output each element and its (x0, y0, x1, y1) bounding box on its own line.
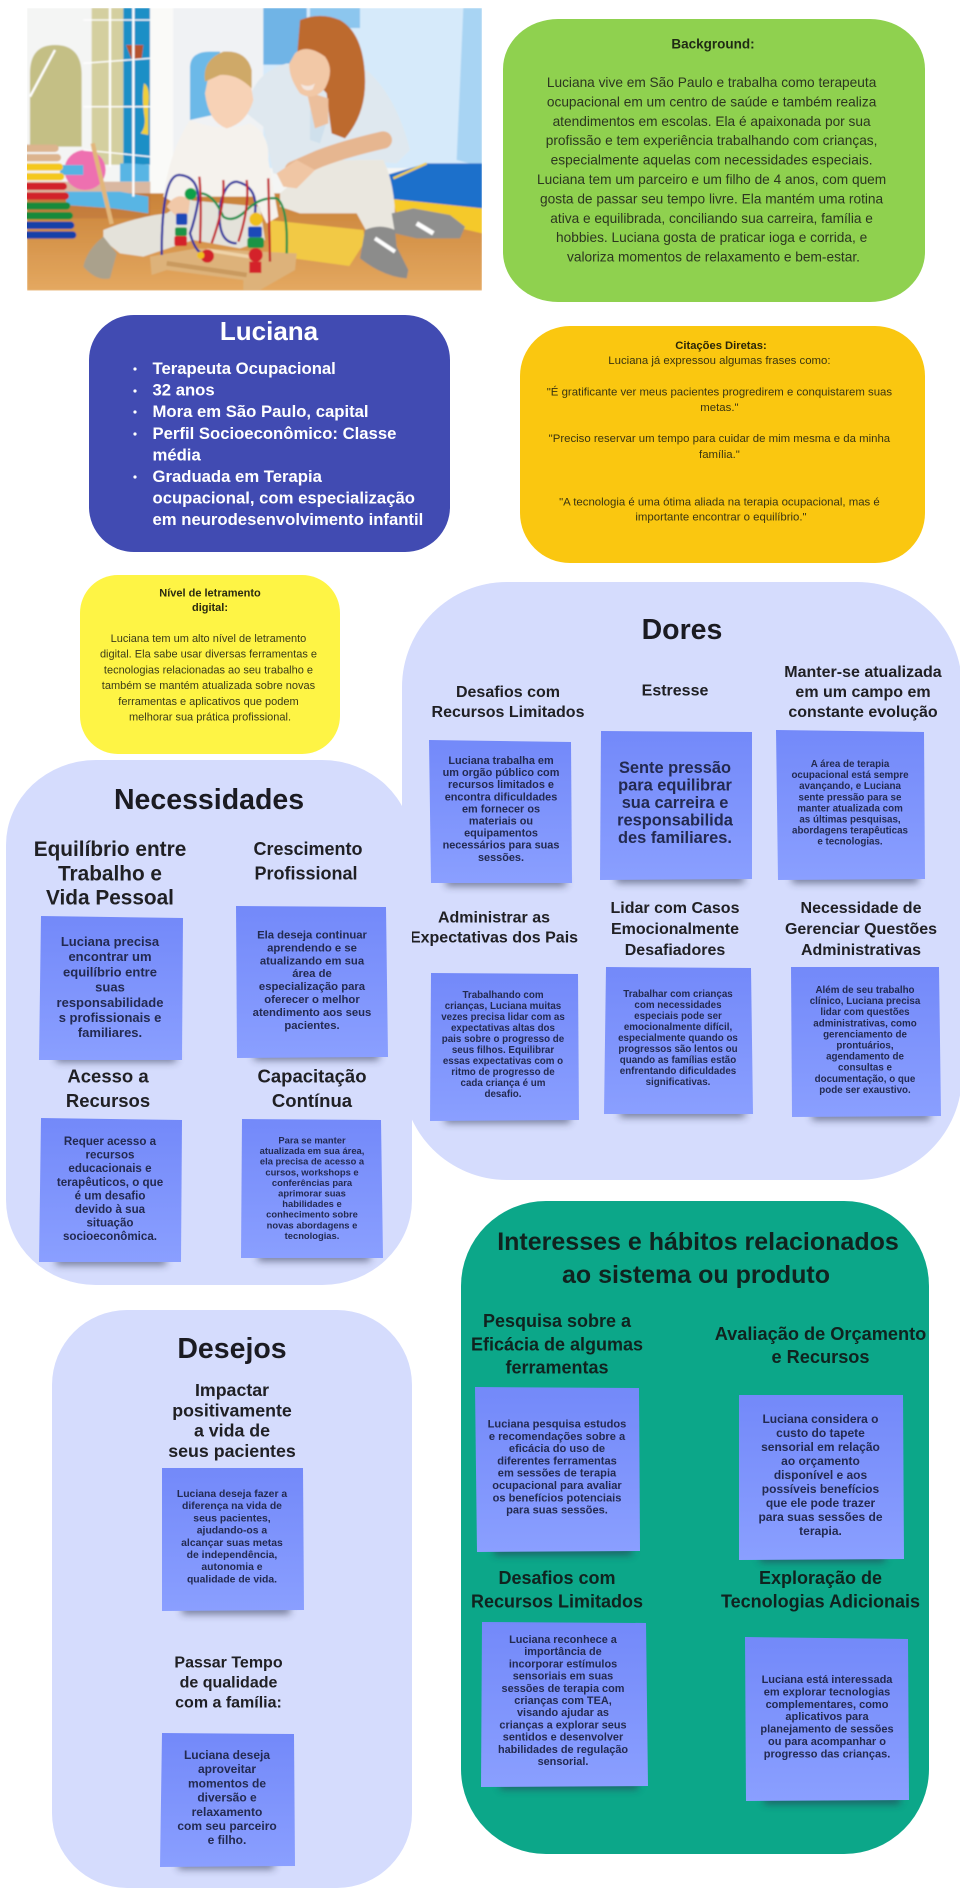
sticky note: pesquisa: ocupacional para avaliar (492, 1480, 622, 1492)
sticky note: acesso a recursos: devido à sua (75, 1202, 146, 1216)
sticky note: estresse (600, 731, 752, 883)
sticky note: capacitação: novas abordagens e (267, 1219, 357, 1230)
letramento text: tecnologias relacionadas ao seu trabalho e (104, 664, 313, 676)
sticky note: impactar (162, 1468, 304, 1614)
sticky note: questões administrativas: pode ser exaustivo. (819, 1084, 911, 1095)
sticky note: estímulos sensoriais: sensoriais em suas (513, 1671, 613, 1683)
sticky note: acesso a recursos: recursos (86, 1148, 134, 1161)
sticky note: passar tempo: Luciana deseja (184, 1748, 270, 1762)
sticky note: capacitação: Para se manter (278, 1134, 346, 1145)
heading: passar tempo: Passar Tempo (174, 1654, 283, 1671)
sticky note: capacitação: conhecimento sobre (266, 1208, 358, 1219)
profile bullet list: Graduada em Terapia (152, 466, 323, 486)
heading: desafios com recursos limitados: Recursos Limitados (471, 1592, 643, 1612)
sticky note: casos desafiadores: significativas. (646, 1076, 711, 1088)
sticky note: estímulos sensoriais: Luciana reconhece a (509, 1634, 618, 1646)
sticky note: questões administrativas: Além de seu trabalho (815, 984, 915, 996)
letramento text: melhorar sua prática profissional. (129, 712, 291, 724)
heading: questões administrativas: Necessidade de (801, 900, 922, 916)
sticky note: casos desafiadores: quando as famílias estão (620, 1054, 736, 1066)
background text: Luciana tem um parceiro e um filho de 4 anos, com quem (537, 172, 886, 186)
interesses title: ao sistema ou produto (562, 1261, 830, 1289)
sticky note: expectativas: seus filhos. Equilibrar (452, 1044, 554, 1056)
heading: passar tempo: com a família: (175, 1694, 282, 1711)
sticky note: casos desafiadores: progressos são lentos ou (618, 1044, 738, 1054)
letramento heading: digital: (192, 602, 228, 614)
sticky note: questões administrativas: agendamento de (826, 1051, 904, 1062)
sticky note: expectativas: Trabalhando com (462, 990, 544, 1000)
sticky note: crescimento: pacientes. (284, 1020, 340, 1032)
profile bullet list: Terapeuta Ocupacional (152, 358, 336, 378)
sticky note: passar tempo: relaxamento (192, 1805, 262, 1819)
sticky note: estímulos sensoriais: crianças com TEA, (514, 1695, 612, 1707)
sticky note: impactar: alcançar suas metas (181, 1537, 283, 1548)
sticky note: atualizada: A área de terapia (811, 758, 890, 770)
sticky note: passar tempo: e filho. (208, 1833, 246, 1847)
sticky note: atualizada: sente pressão para se (799, 792, 902, 803)
sticky note: expectativas: desafio. (484, 1088, 522, 1100)
heading: casos emocionalmente desafiadores: Desafiadores (625, 942, 725, 958)
citações text: Luciana já expressou algumas frases como: (608, 355, 831, 367)
sticky note: crescimento: área de (292, 968, 332, 980)
heading: manter-se atualizada: Manter-se atualizada (784, 664, 942, 680)
citações heading: Citações Diretas: (675, 340, 767, 352)
heading: acesso a recursos: Recursos (66, 1090, 150, 1110)
desejos title: Desejos (177, 1333, 287, 1365)
sticky note: estímulos sensoriais: importância de (524, 1646, 602, 1658)
sticky note: recursos limitados: um orgão público com (443, 767, 560, 779)
sticky note: questões administrativas (791, 967, 941, 1120)
sticky note: casos desafiadores: emocionalmente difícil, (624, 1022, 732, 1032)
sticky note: casos desafiadores: especialmente quando os (618, 1032, 738, 1044)
sticky note: equilíbrio: familiares. (78, 1025, 142, 1040)
dores title: Dores (642, 614, 722, 646)
sticky note: atualizada: ocupacional está sempre (791, 770, 909, 781)
sticky note: recursos limitados: materiais ou (469, 816, 533, 828)
photo: therapist and child playing with bead maze (27, 8, 482, 291)
sticky note: questões administrativas: consultas e (838, 1062, 893, 1073)
sticky note: estresse: des familiares. (618, 829, 732, 847)
sticky note: orçamento: custo do tapete (776, 1426, 865, 1440)
sticky note: estímulos sensoriais: visando ajudar as (517, 1707, 609, 1719)
citações text: "É gratificante ver meus pacientes progredirem e conquistarem suas (547, 386, 892, 398)
heading: questões administrativas: Administrativas (801, 942, 921, 958)
sticky note: orçamento: possíveis benefícios (762, 1482, 880, 1496)
sticky note: casos desafiadores (604, 967, 753, 1117)
sticky note: estímulos sensoriais: crianças a explorar seus (499, 1719, 627, 1731)
sticky note: recursos limitados: encontra dificuldades (445, 791, 557, 803)
sticky note: expectativas: essas expectativas com o (443, 1056, 563, 1066)
citações text: família." (699, 449, 740, 461)
heading: pesquisa eficácia: Pesquisa sobre a (483, 1311, 632, 1331)
background text: profissão e tem experiência trabalhando com crianças, (546, 133, 877, 148)
sticky note: atualizada: abordagens terapêuticas (792, 825, 909, 836)
heading: crescimento: Profissional (254, 864, 358, 884)
citações text: importante encontrar o equilíbrio." (635, 512, 807, 524)
citações text: "Preciso reservar um tempo para cuidar de mim mesma e da minha (549, 433, 891, 445)
sticky note: questões administrativas: prontuários, (836, 1040, 894, 1051)
profile name: Luciana (220, 316, 319, 346)
citações text: metas." (700, 402, 739, 414)
sticky note: orçamento: Luciana considera o (762, 1412, 879, 1426)
heading: crescimento: Crescimento (253, 839, 363, 859)
sticky note: crescimento: aprendendo e se (267, 942, 357, 954)
sticky note: capacitação: atualizada em sua área, (260, 1145, 364, 1156)
heading: equilíbrio: Vida Pessoal (46, 886, 174, 909)
sticky note: impactar: ajudando-os a (197, 1525, 267, 1536)
sticky note: expectativas: pais sobre o progresso de (442, 1034, 565, 1044)
heading: desafios com recursos limitados: Desafios com (498, 1568, 616, 1588)
child (162, 136, 280, 224)
heading: desafios com recursos limitados: Desafios com (456, 684, 560, 700)
sticky note: pesquisa: em sessões de terapia (498, 1468, 617, 1480)
panel: necessidades (6, 760, 412, 1285)
sticky note: tecnologias adicionais: planejamento de sessões (760, 1724, 894, 1736)
sticky note: recursos limitados: Luciana trabalha em (448, 755, 554, 767)
sticky note: tecnologias adicionais: ou para acompanhar o (768, 1736, 886, 1748)
sticky note: atualizada (776, 730, 925, 883)
heading: avaliação de orçamento: e Recursos (771, 1347, 870, 1367)
sticky note: impactar: diferença na vida de (182, 1501, 282, 1512)
sticky note: orçamento: disponível e aos (774, 1468, 868, 1482)
sticky note: acesso a recursos: educacionais e (68, 1162, 152, 1175)
sticky note: expectativas: crianças, Luciana muitas (445, 1000, 562, 1012)
sticky note: impactar: qualidade de vida. (187, 1574, 277, 1585)
sticky note: equilíbrio: Luciana precisa (61, 934, 160, 948)
sticky note: expectativas: vezes precisa lidar com as (441, 1012, 565, 1022)
sticky note: recursos limitados: em fornecer os (462, 803, 540, 815)
citações text: "A tecnologia é uma ótima aliada na terapia ocupacional, mas é (559, 496, 880, 508)
sticky note: tecnologias adicionais: aplicativos para (785, 1711, 869, 1723)
sticky note: capacitação: aprimorar suas (278, 1187, 346, 1198)
sticky note: passar tempo (160, 1733, 295, 1869)
sticky note: passar tempo: momentos de (188, 1776, 266, 1790)
heading: impactar positivamente: seus pacientes (168, 1441, 296, 1461)
profile bullet list: Perfil Socioeconômico: Classe (152, 423, 396, 442)
heading: impactar positivamente: positivamente (172, 1400, 292, 1420)
sticky note: acesso a recursos: Requer acesso a (64, 1134, 157, 1148)
sticky note: capacitação: tecnologias. (285, 1229, 339, 1240)
sticky note: impactar: seus pacientes, (193, 1513, 271, 1524)
panel: background (503, 19, 925, 302)
sticky note: capacitação: ela precisa de acesso a (260, 1155, 365, 1166)
sticky note: estímulos sensoriais: habilidades de regulação (498, 1744, 628, 1756)
heading: pesquisa eficácia: ferramentas (505, 1358, 609, 1378)
heading: impactar positivamente: Impactar (195, 1380, 269, 1400)
sticky note: questões administrativas: administrativas, como (813, 1018, 917, 1029)
background heading: Background: (671, 36, 755, 52)
profile bullet list: ocupacional, com especialização (152, 488, 415, 507)
profile bullet list: Mora em São Paulo, capital (152, 402, 369, 421)
sticky note: equilíbrio: responsabilidade (57, 994, 163, 1009)
sticky note: impactar: autonomia e (201, 1562, 263, 1573)
heading: capacitação contínua: Contínua (272, 1090, 353, 1110)
sticky note: expectativas: ritmo de progresso de (451, 1066, 555, 1078)
sticky note: estresse: responsabilida (617, 812, 734, 830)
heading: acesso a recursos: Acesso a (67, 1065, 149, 1086)
bead maze toy (150, 248, 297, 290)
sticky note: recursos limitados: equipamentos (464, 828, 538, 840)
sticky note: crescimento: especialização para (259, 981, 366, 993)
sticky note: questões administrativas: gerenciamento de (823, 1029, 907, 1040)
heading: manter-se atualizada: constante evolução (788, 704, 938, 720)
sticky note: orçamento: terapia. (799, 1524, 842, 1538)
sticky note: pesquisa: e recomendações sobre a (489, 1431, 626, 1443)
letramento text: também se mantém atualizada sobre novas (102, 680, 316, 692)
background text: hobbies. Luciana gosta de praticar ioga e corrida, e (556, 230, 867, 245)
panel: Luciana profile (89, 315, 450, 552)
heading: questões administrativas: Gerenciar Questões (785, 920, 937, 938)
sticky note: tecnologias adicionais: complementares, como (766, 1699, 889, 1711)
sticky note: orçamento: que ele pode trazer (766, 1496, 876, 1510)
sticky note: recursos limitados: recursos limitados e (448, 779, 554, 791)
sticky note: estímulos sensoriais: sessões de terapia com (502, 1683, 625, 1695)
sticky note: capacitação: habilidades e (282, 1198, 342, 1209)
panel: dores (402, 582, 960, 1180)
sticky note: pesquisa: os benefícios potenciais (493, 1492, 621, 1504)
sticky note: questões administrativas: clínico, Luciana precisa (810, 996, 921, 1007)
sticky note: recursos limitados: necessários para suas (443, 840, 559, 852)
sticky note: impactar: de independência, (187, 1550, 277, 1560)
sticky note: estresse: Sente pressão (619, 759, 731, 777)
sticky note: orçamento: ao orçamento (781, 1454, 860, 1468)
heading: desafios com recursos limitados: Recursos Limitados (432, 704, 585, 720)
sticky note: equilíbrio: s profissionais e (59, 1010, 161, 1024)
heading: administrar expectativas: Administrar as (438, 909, 550, 926)
sticky note: pesquisa (475, 1387, 640, 1555)
sticky note: expectativas: cada criança é um (461, 1078, 546, 1088)
sticky note: capacitação: conferências para (272, 1176, 353, 1187)
sticky note: tecnologias adicionais: progresso das crianças. (764, 1748, 890, 1760)
sticky note: estresse: para equilibrar (618, 776, 733, 794)
panel: interesses e hábitos (461, 1201, 929, 1854)
sticky note: recursos limitados (429, 740, 572, 886)
sticky note: crescimento: atualizando em sua (260, 955, 365, 967)
background text: especialmente aquelas com necessidades especiais. (551, 152, 873, 167)
sticky note: acesso a recursos: situação (86, 1216, 134, 1229)
profile bullet list: 32 anos (152, 380, 215, 399)
woman (247, 63, 410, 180)
sticky note: orçamento: para suas sessões de (758, 1510, 883, 1524)
background text: atendimentos em escolas. Ela é apaixonada por sua (553, 113, 871, 128)
letramento heading: Nível de letramento (159, 588, 261, 600)
sticky note: acesso a recursos: socioeconômica. (63, 1230, 157, 1243)
heading: exploração de tecnologias: Exploração de (759, 1568, 882, 1588)
heading: estresse: Estresse (642, 682, 708, 700)
sticky note: tecnologias adicionais: em explorar tecnologias (764, 1686, 890, 1698)
sticky note: estímulos sensoriais: sensorial. (538, 1756, 588, 1768)
background text: Luciana vive em São Paulo e trabalha como terapeuta (547, 74, 877, 90)
sticky note: orçamento: sensorial em relação (761, 1440, 880, 1454)
sticky note: atualizada: as últimas pesquisas, (799, 814, 901, 825)
sticky note: estímulos sensoriais (481, 1622, 648, 1789)
heading: avaliação de orçamento: Avaliação de Orçamento (715, 1324, 926, 1344)
heading: equilíbrio: Trabalho e (58, 862, 162, 885)
sticky note: atualizada: e tecnologias. (817, 836, 883, 847)
sticky note: atualizada: avançando, e Luciana (799, 781, 901, 792)
sticky note: estímulos sensoriais: incorporar estímulos (509, 1658, 617, 1670)
heading: equilíbrio: Equilíbrio entre (34, 838, 186, 860)
sticky note: recursos limitados: sessões. (478, 852, 524, 864)
sticky note: equilíbrio: suas (95, 979, 125, 994)
sticky note: crescimento (236, 906, 388, 1060)
sticky note: pesquisa: diferentes ferramentas (497, 1455, 617, 1467)
heading: administrar expectativas: Expectativas dos Pais (410, 929, 578, 946)
sticky note: passar tempo: aproveitar (198, 1762, 256, 1776)
panel: nível de letramento digital (80, 575, 340, 754)
sticky note: atualizada: manter atualizada com (797, 803, 903, 814)
heading: casos emocionalmente desafiadores: Lidar com Casos (611, 900, 740, 916)
sticky note: equilíbrio: encontrar um (68, 949, 152, 964)
background text: ocupacional em um centro de saúde e também realiza (547, 94, 877, 109)
background text: valoriza momentos de relaxamento e bem-estar. (567, 249, 860, 264)
sticky note: pesquisa: Luciana pesquisa estudos (488, 1418, 626, 1430)
sticky note: acesso a recursos (39, 1118, 182, 1265)
sticky note: capacitação: cursos, workshops e (265, 1166, 359, 1177)
profile bullet list (133, 358, 423, 529)
background text: ativa e equilibrada, conciliando sua carreira, família e (550, 210, 873, 225)
heading: casos emocionalmente desafiadores: Emocionalmente (611, 920, 739, 938)
sticky note: expectativas (430, 973, 579, 1123)
sticky note: acesso a recursos: terapêuticos, o que (57, 1175, 164, 1188)
sticky note: crescimento: Ela deseja continuar (257, 930, 368, 942)
letramento text: digital. Ela sabe usar diversas ferramentas e (100, 649, 317, 661)
profile bullet list: em neurodesenvolvimento infantil (152, 510, 423, 529)
heading: manter-se atualizada: em um campo em (795, 684, 931, 700)
sticky note: acesso a recursos: é um desafio (75, 1189, 145, 1202)
sticky note: equilíbrio (39, 916, 183, 1062)
sticky note: tecnologias adicionais: Luciana está interessada (762, 1674, 893, 1686)
sticky note: crescimento: oferecer o melhor (264, 994, 360, 1006)
heading: exploração de tecnologias: Tecnologias Adicionais (721, 1592, 920, 1612)
sticky note: estresse: sua carreira e (622, 794, 728, 812)
sticky note: pesquisa: eficácia do uso de (509, 1443, 605, 1455)
sticky note: casos desafiadores: com necessidades (634, 1000, 722, 1010)
sticky note: impactar: Luciana deseja fazer a (177, 1488, 287, 1500)
sticky note: equilíbrio: equilíbrio entre (63, 964, 157, 979)
necessidades title: Necessidades (114, 784, 304, 816)
sticky note: pesquisa: para suas sessões. (506, 1505, 608, 1517)
heading: capacitação contínua: Capacitação (258, 1065, 366, 1086)
sticky note: passar tempo: com seu parceiro (177, 1819, 277, 1833)
letramento text: Luciana tem um alto nível de letramento (111, 633, 306, 645)
panel: desejos (52, 1310, 412, 1888)
sticky note: casos desafiadores: especiais pode ser (634, 1010, 722, 1022)
sticky note: estímulos sensoriais: sentidos e desenvolver (503, 1732, 624, 1744)
sticky note: orçamento (739, 1395, 904, 1562)
sticky note: casos desafiadores: Trabalhar com crianças (623, 988, 733, 1000)
sticky note: casos desafiadores: enfrentando dificuldades (620, 1066, 737, 1076)
sticky note: questões administrativas: lidar com questões (820, 1007, 910, 1018)
sticky note: questões administrativas: documentação, o que (815, 1073, 916, 1084)
heading: impactar positivamente: a vida de (194, 1421, 270, 1441)
panel: citações diretas (520, 326, 925, 563)
background text: gosta de passar seu tempo livre. Ela mantém uma rotina (540, 191, 884, 206)
sticky note: capacitação (241, 1119, 383, 1261)
interesses title: Interesses e hábitos relacionados (497, 1228, 899, 1256)
sticky note: expectativas: expectativas altas dos (451, 1022, 556, 1034)
profile bullet list: média (152, 445, 201, 464)
sticky note: tecnologias adicionais (745, 1637, 909, 1804)
heading: pesquisa eficácia: Eficácia de algumas (471, 1334, 643, 1354)
sticky note: crescimento: atendimento aos seus (253, 1007, 371, 1019)
sticky note: passar tempo: diversão e (197, 1791, 257, 1805)
letramento text: ferramentas e aplicativos que podem (118, 696, 299, 708)
heading: passar tempo: de qualidade (180, 1674, 278, 1691)
